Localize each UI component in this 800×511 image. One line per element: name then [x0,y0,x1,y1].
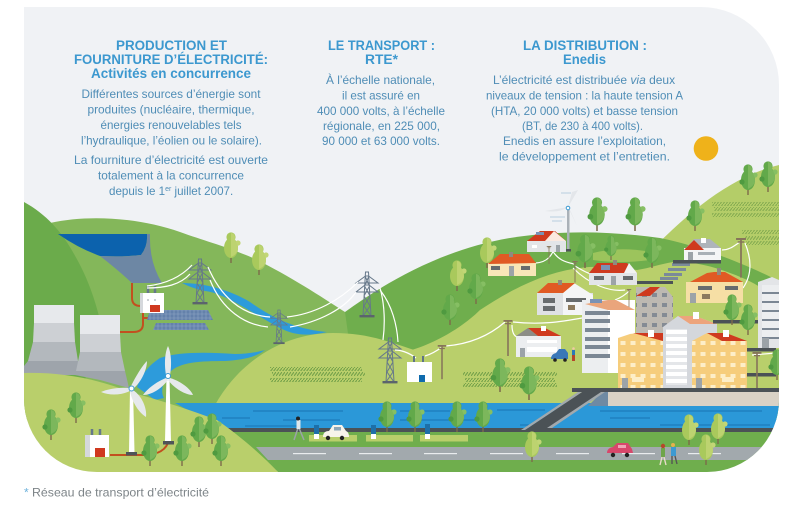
wind turbine right [143,346,193,444]
dam wall [100,234,162,283]
heading: production [74,38,268,81]
footnote: Réseau de transport d’électricité [32,486,209,500]
text: production: l’hydraulique, l’éolien ou le solaire). [81,133,262,147]
house: large white [537,280,593,315]
hill: village light green patch [593,249,650,262]
road dashes [293,453,721,454]
river: upper stream [182,283,327,335]
town trees [723,294,787,380]
car: red [607,443,633,457]
substation: power plant [140,286,164,313]
illustration: energy landscape [24,161,787,472]
hill: village light slope [385,262,779,420]
text: distribution: (HTA, 20 000 volts) et basse tension [491,104,678,118]
text: production: énergies renouvelables tels [100,118,242,132]
walkers [660,443,677,465]
text: transport: 90 000 et 63 000 volts. [322,134,440,148]
green strip [230,432,779,472]
person: by blue car [572,347,575,361]
small wind turbine [545,190,578,252]
reservoir [58,234,147,256]
solar panels [147,310,213,330]
heading: distribution [523,38,647,67]
text: production: produites (nucléaire, thermique, [88,102,254,116]
utility poles [438,238,762,388]
house: gabled with car [516,326,561,357]
text: transport: il est assuré en [342,88,420,102]
text: transport: 400 000 volts, à l’échelle [317,104,445,118]
heading: distribution: LA DISTRIBUTION : [523,38,647,53]
hill: left dark slope [24,202,98,378]
building: right edge [758,277,779,348]
text: production: er [165,186,172,193]
substation: transport [407,356,432,382]
hill: central light hill [216,333,413,403]
text: transport: régionale, en 225 000, [323,119,440,133]
hillside trees [224,161,778,325]
text: distribution: L’électricité est distribuée via deux [493,73,675,87]
building: yellow left [618,330,663,388]
pedestrian [294,416,304,440]
text: distribution: Enedis en assure l’exploitation, [503,134,666,148]
crop fields: right hill [712,202,779,245]
heading: production: FOURNITURE D’ÉLECTRICITÉ: [74,52,268,67]
wind turbine left [101,361,147,456]
heading: production: Activités en concurrence [91,66,251,81]
building: yellow right [692,330,747,388]
quay [572,388,779,406]
ramp [521,392,605,430]
building: striped tower [582,299,635,373]
substation: wind farm [85,429,109,457]
house: cream right [686,268,743,303]
charging stations [314,424,430,439]
terrace bars [713,320,776,376]
parking patches [309,435,468,442]
building: white centre [663,312,717,388]
bank line [228,428,779,432]
text: production: totalement à la concurrence [98,168,244,182]
car: white [323,425,349,440]
text: distribution: niveaux de tension : la haute tension A [486,88,683,102]
footnote: * [24,486,29,500]
text: distribution: (BT, de 230 à 400 volts). [522,119,643,133]
crop fields [270,367,557,387]
road [256,447,779,460]
car: blue [551,349,568,362]
house: far right gabled [684,238,721,260]
heading: transport: LE TRANSPORT : [328,38,435,53]
cooling tower left [24,305,78,375]
text: production: juillet 2007. [171,185,233,198]
hill: left background [24,218,360,420]
heading: distribution: Enedis [563,52,606,67]
text: production: Différentes sources d’énergie sont [82,87,261,101]
hill: village dark green hill [345,232,779,420]
building: grey brick [636,287,673,335]
text: production [74,87,268,198]
river: main [175,403,779,428]
heading: transport: RTE* [365,52,399,67]
text: distribution [486,73,683,164]
text: transport: À l’échelle nationale, [326,72,435,87]
sun [694,136,718,161]
heading: transport [328,38,435,67]
text: transport [317,72,445,148]
house: top hill [527,231,566,252]
house: cream left [488,252,536,276]
power lines [147,242,776,358]
text: production: La fourniture d’électricité est ouverte [74,153,268,167]
text: production: depuis le 1 [109,185,165,198]
house: solar roof [589,260,637,285]
hill: foreground light hill [24,373,278,472]
river ripples [222,410,770,426]
trees: foreground [42,358,728,466]
river: middle stream [137,350,265,400]
pylons [189,259,401,383]
text: distribution: le développement et l’entretien. [499,150,670,164]
stairs [637,260,721,284]
orange pipes [110,283,168,455]
hill: far right light hill [663,165,779,280]
cooling tower right [75,315,129,388]
heading: production: PRODUCTION ET [116,38,228,53]
